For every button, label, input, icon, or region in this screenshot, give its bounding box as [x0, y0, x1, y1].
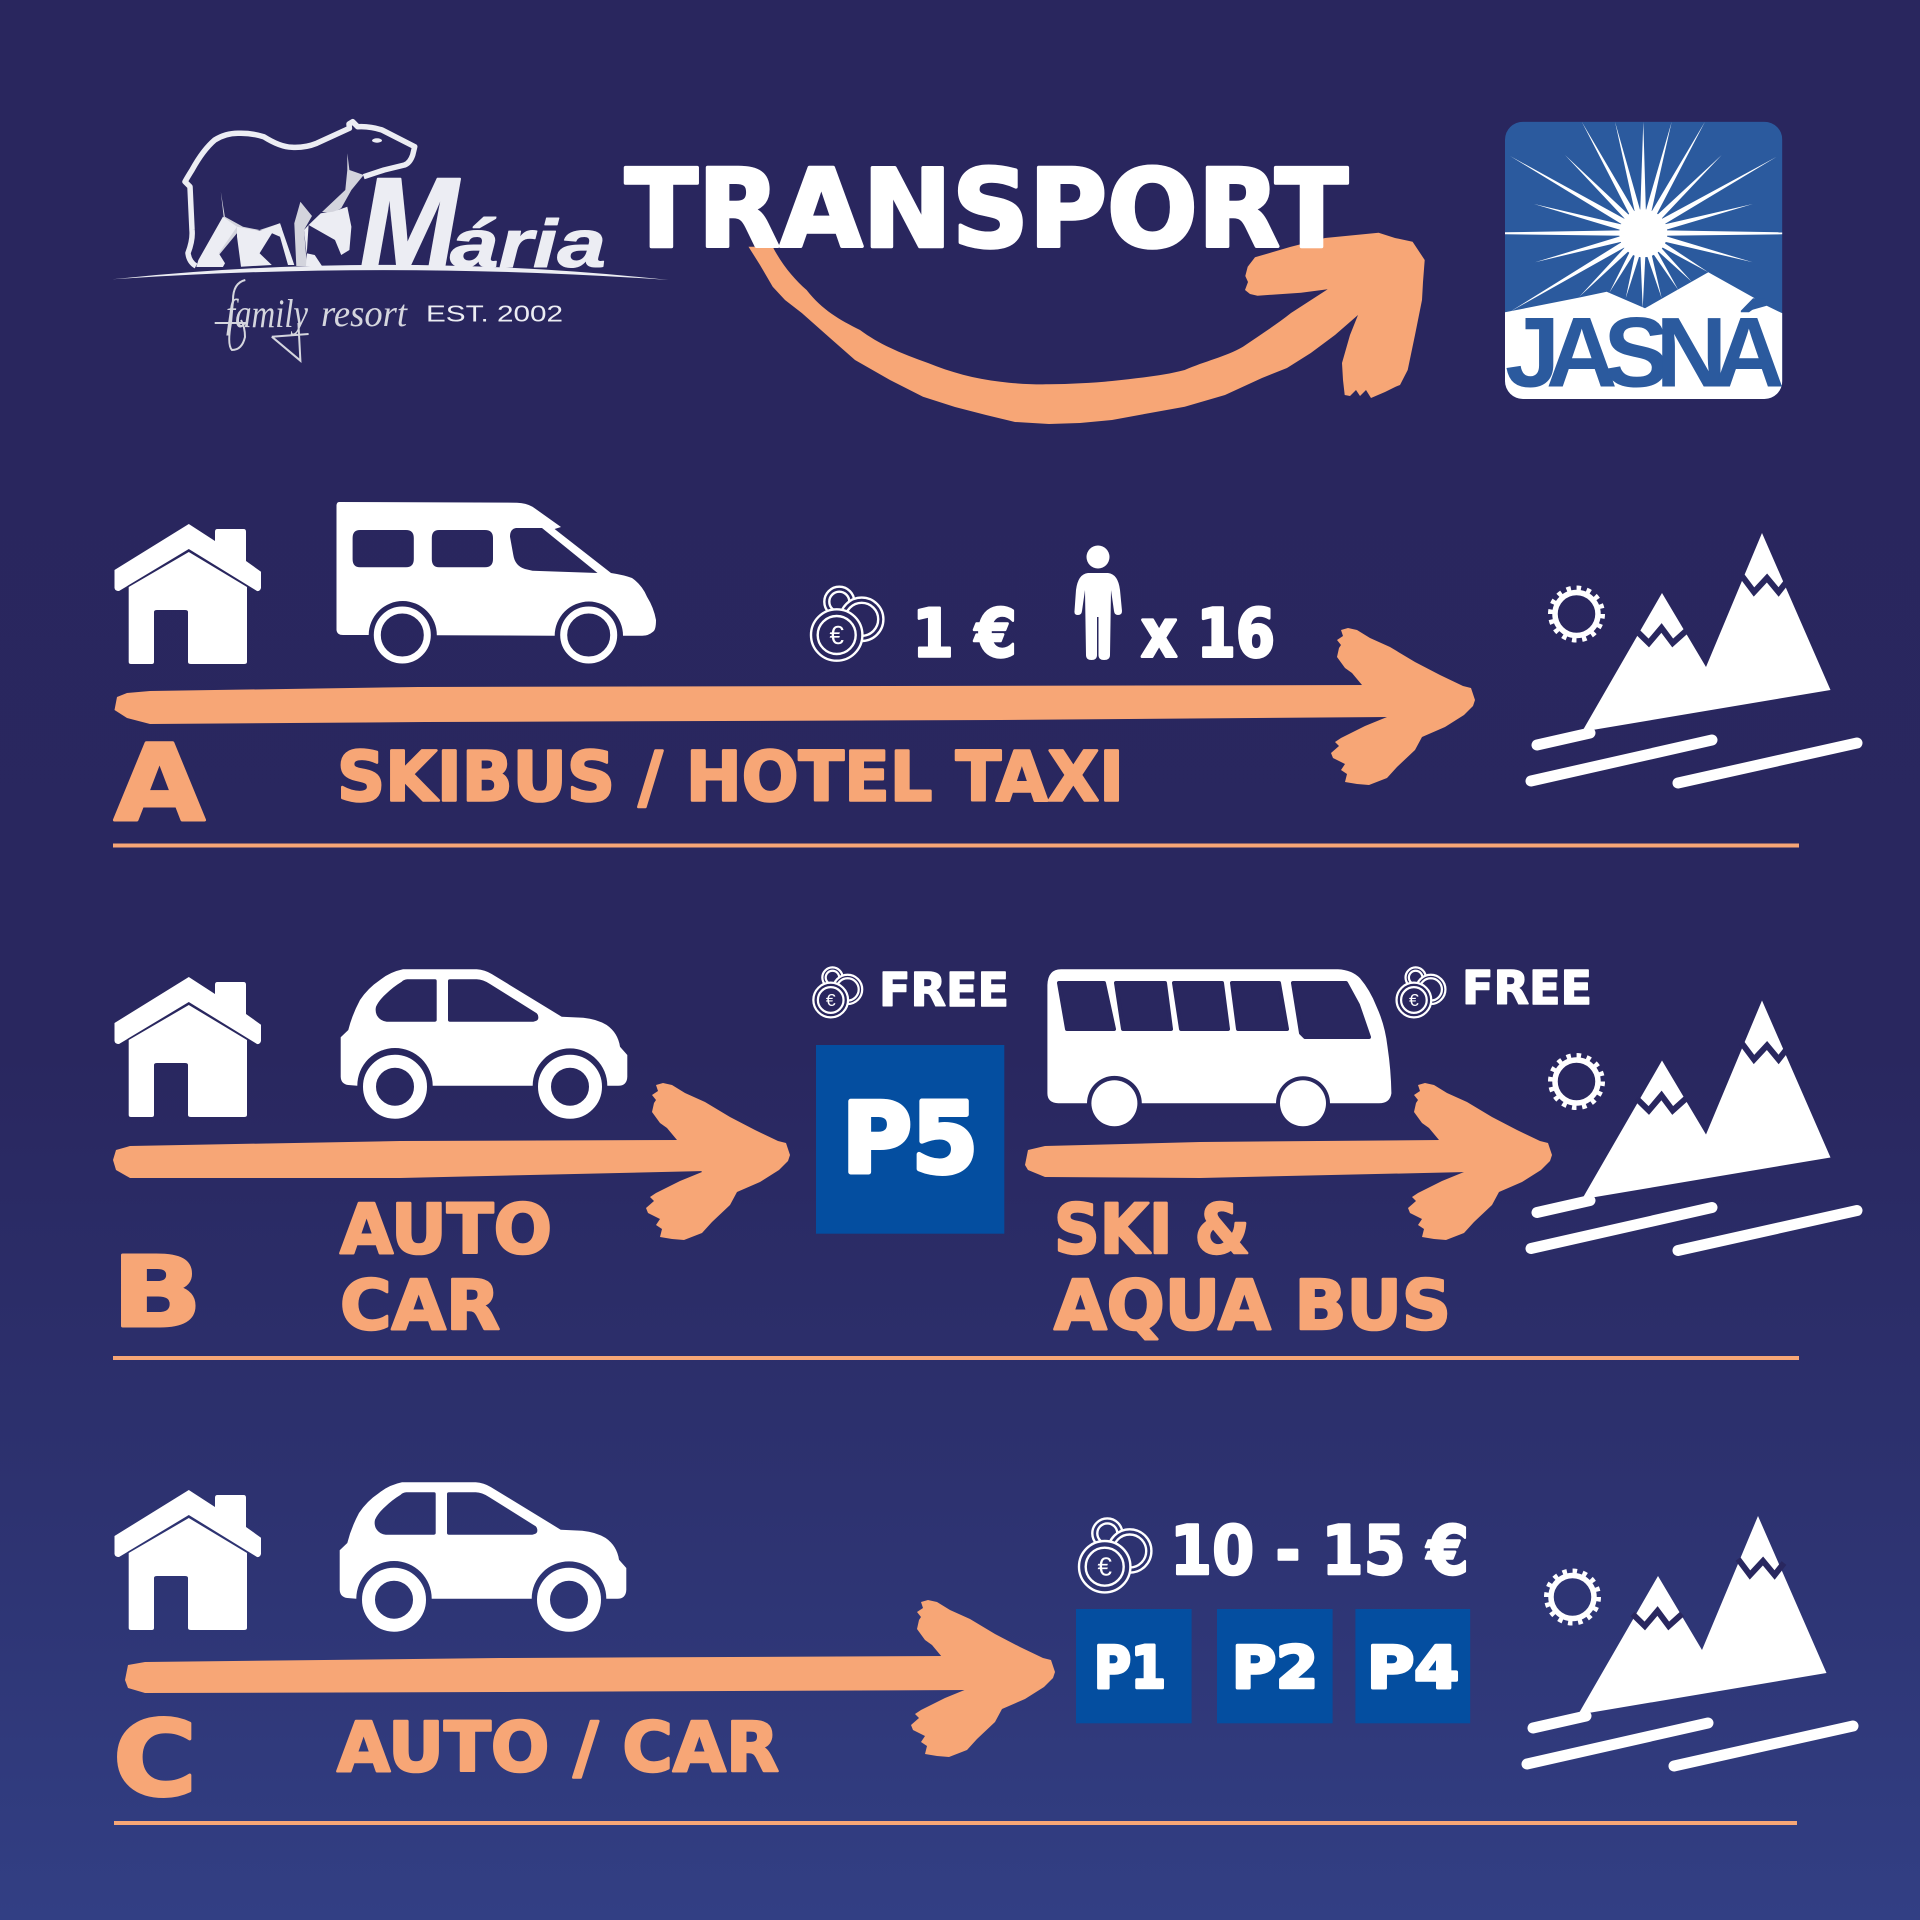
- capacity: x 16: [1141, 594, 1275, 672]
- icon: coins: [811, 587, 883, 661]
- arrow B1: [113, 1083, 790, 1240]
- letter C: C: [113, 1698, 197, 1820]
- logo wordmark: ária: [450, 206, 606, 282]
- label: auto car: AUTO / CAR: [337, 1708, 779, 1788]
- logo: Jasná: [1505, 122, 1782, 408]
- logo tagline: [215, 280, 563, 361]
- arrow C: [125, 1600, 1055, 1757]
- logo sun rays: [1505, 122, 1782, 312]
- logo sky: [1505, 122, 1782, 399]
- icon: coins: [1397, 967, 1445, 1017]
- free label: FREE: [1462, 961, 1592, 1015]
- logo tagline: EST. 2002: [426, 301, 563, 327]
- label: aqua bus: AQUA BUS: [1054, 1266, 1451, 1346]
- icon: bus: [1047, 969, 1391, 1126]
- parking P2: P2: [1232, 1633, 1318, 1701]
- free label: FREE: [879, 963, 1009, 1017]
- logo: Mária family resort: [113, 122, 669, 361]
- icon: coins: [1079, 1518, 1151, 1592]
- parking P2: [1217, 1609, 1333, 1723]
- panel: route B: [112, 961, 1857, 1349]
- letter B: B: [112, 1236, 202, 1349]
- panel: route A: [114, 502, 1857, 845]
- logo word: JASNÁ: [1505, 297, 1782, 408]
- logo sun: [1619, 209, 1667, 257]
- icon: house: [114, 524, 261, 664]
- parking P4: [1355, 1609, 1470, 1723]
- logo tagline: family: [226, 291, 308, 336]
- icon: coins: €: [826, 990, 836, 1010]
- parking P5: [816, 1045, 1004, 1234]
- logo wordmark: M: [360, 152, 460, 295]
- icon: coins: €: [829, 620, 844, 650]
- icon: coins: €: [1097, 1552, 1112, 1582]
- icon: coins: €: [1409, 990, 1419, 1010]
- icon: house: [114, 1490, 261, 1630]
- parking P4: P4: [1367, 1633, 1459, 1701]
- price: 1 €: [912, 594, 1017, 672]
- icon: house: [114, 977, 261, 1117]
- icon: coins: [813, 967, 862, 1017]
- parking P1: P1: [1094, 1633, 1166, 1701]
- icon: person: [1074, 546, 1122, 660]
- label: ski and: SKI &: [1054, 1190, 1250, 1270]
- parking P1: [1076, 1609, 1192, 1723]
- label: auto: AUTO: [340, 1190, 552, 1270]
- arrow A: [114, 628, 1475, 785]
- logo wordmark: [360, 152, 606, 295]
- price range: 10 - 15 €: [1170, 1512, 1469, 1591]
- parking P5: P5: [842, 1082, 978, 1195]
- arrow: curved brush arrow to Jasná: [748, 233, 1425, 424]
- icon: mountains: [1531, 533, 1857, 783]
- arrow B2: [1025, 1083, 1552, 1240]
- label: car: CAR: [340, 1266, 500, 1346]
- icon: car: [341, 969, 627, 1112]
- icon: car: [340, 1482, 626, 1625]
- title: TRANSPORT: [625, 148, 1348, 273]
- letter A: A: [114, 722, 205, 845]
- logo ground line: [113, 265, 669, 280]
- icon: mountains: [1527, 1516, 1853, 1766]
- logo snow mountain: [1505, 272, 1782, 399]
- icon: polar bear: [185, 122, 415, 267]
- label: skibus: SKIBUS / HOTEL TAXI: [337, 738, 1124, 818]
- panel: route C: [113, 1482, 1853, 1820]
- icon: van: [336, 502, 656, 660]
- logo tagline: resort: [321, 293, 408, 335]
- icon: mountains: [1531, 1000, 1857, 1250]
